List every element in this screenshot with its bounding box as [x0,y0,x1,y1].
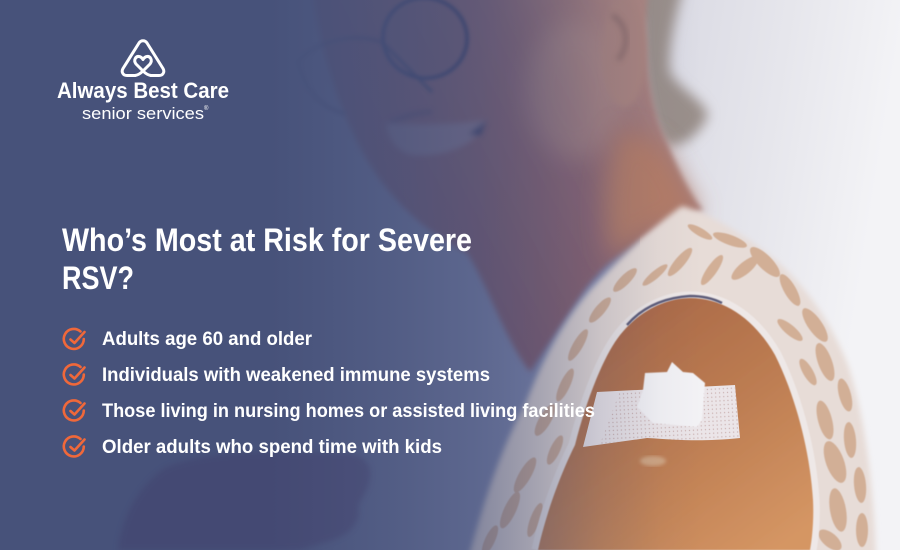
item: time with kids: Older adults who spend time with kids [102,437,442,458]
wall background on the right [640,0,900,550]
icon: orange check circle [64,400,84,420]
checklist of risk groups [64,329,595,458]
neck warm tone [605,130,700,260]
sleeve shadow line [627,296,722,325]
title: Who’s Most at Risk for Severe [62,222,472,258]
glasses [298,0,473,114]
upper arm [538,298,813,550]
tagline: senior services [82,104,204,123]
icon: orange check circle [64,329,84,349]
sleeve hem [538,298,813,550]
title: RSV? [62,260,134,296]
blurred bluish backdrop on the left [0,0,640,550]
item: weakened immune systems: Individuals with weakened immune systems [102,365,490,386]
icon: orange check circle [64,436,84,456]
item: adults 60 and older: Adults age 60 and older [102,329,313,350]
dress shoulder [468,206,876,550]
faint hand under overlay [118,452,370,550]
smile [386,112,487,155]
title [62,222,472,296]
face and jaw [310,0,703,372]
skin blemish [640,456,666,466]
brand name: Always Best Care [57,78,229,103]
icon: orange check circle [64,364,84,384]
ear [602,0,646,107]
icon: tent with heart [122,41,164,76]
registered mark: ® [204,105,209,112]
item: nursing homes or assisted living: Those living in nursing homes or assisted living facilities [102,401,595,422]
bandage tape [583,385,740,447]
gauze pad [637,362,705,427]
hair [540,0,708,146]
dress pattern leaves [479,222,868,550]
logo: Always Best Care [57,41,229,123]
cheek highlight [525,20,625,160]
